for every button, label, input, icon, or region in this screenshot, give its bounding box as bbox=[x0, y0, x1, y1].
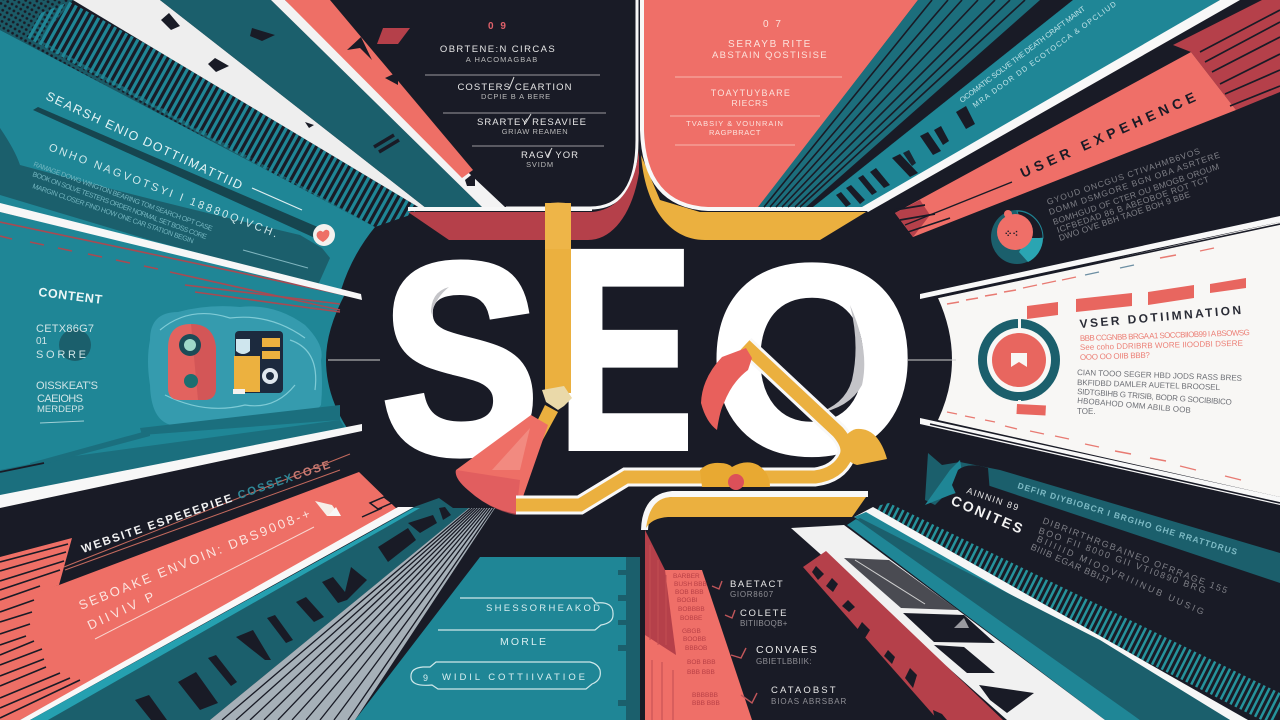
subheading: search: ONHO NAGVOTSYI I 18880QIVCH. bbox=[47, 142, 279, 240]
callout: top label bbox=[438, 598, 613, 630]
text: item 4: BIOAS ABRSBAR bbox=[771, 697, 847, 706]
text: item 4: CATAOBST bbox=[771, 685, 838, 696]
text block: content list: CETX86G7 bbox=[36, 323, 94, 335]
divider: white band top bbox=[0, 203, 362, 300]
text block: content list: MERDEPP bbox=[37, 404, 84, 415]
text: item 4 bbox=[771, 685, 847, 706]
illustration: yellow mechanism bbox=[456, 202, 887, 515]
text: contents overline: AINNIN 89 bbox=[965, 485, 1020, 512]
text block: content list: OISSKEAT'S bbox=[36, 380, 98, 392]
text: item 1: OBRTENE:N CIRCAS bbox=[440, 44, 556, 55]
pipe bbox=[516, 345, 847, 505]
text: sub 1: ABSTAIN QOSTISISE bbox=[712, 50, 828, 61]
text block: user experience body bbox=[1045, 146, 1221, 243]
blocks: coral bbox=[1027, 278, 1246, 319]
text block: grey copy: HBOBAHOD OMM ABILB OOB bbox=[1077, 396, 1191, 415]
text: coral notes: BUSH BBB bbox=[674, 581, 707, 588]
strip: red with notches bbox=[803, 551, 1003, 720]
text: coral notes: BOB BBB bbox=[687, 659, 716, 666]
icon: black device bbox=[233, 331, 283, 394]
callout: bottom label: WIDIL COTTIIVATIOE bbox=[442, 672, 585, 683]
text block: content list: SORRE bbox=[36, 349, 86, 361]
text: heading 1: SERAYB RITE bbox=[728, 39, 812, 50]
panel: bottom right strips bbox=[791, 453, 1280, 720]
text block: grey copy: TOE. bbox=[1077, 407, 1096, 416]
callout: top label: SHESSORHEAKOD bbox=[486, 603, 600, 614]
band: red curve bbox=[408, 150, 639, 240]
text block: contents body: DIBRIRTHRGBAINEO OFRRAGE 155 bbox=[1041, 516, 1229, 595]
callout: bottom label: 9 bbox=[423, 673, 428, 683]
text: item 2 bbox=[740, 608, 788, 628]
text: coral notes: BARBER bbox=[673, 573, 700, 580]
label: number: 0 7 bbox=[763, 19, 783, 30]
icon: red device bbox=[168, 324, 216, 400]
panel: mobile optimisation bbox=[355, 557, 640, 720]
text block: coral copy bbox=[1080, 328, 1250, 362]
connector line right bbox=[908, 359, 956, 361]
text: item 3: CONVAES bbox=[756, 644, 818, 656]
icon: ring with bookmark bbox=[978, 317, 1060, 416]
blocks: dark ticks bbox=[135, 507, 451, 720]
title: SEO: E bbox=[557, 190, 694, 509]
strip: white with dark blocks bbox=[791, 525, 1105, 720]
panel: top right fan bbox=[758, 0, 1240, 212]
text: small teal lines: MRA DOOR DD ECOTOCCA & OPCLIUD bbox=[971, 0, 1118, 110]
text: coral notes: BBB BBB bbox=[687, 669, 715, 676]
label: number: 0 9 bbox=[488, 21, 508, 32]
heading: search: SEARSH ENIO DOTTIIMATTIID bbox=[44, 89, 245, 193]
text: item 3: SRARTEY RESAVIEE bbox=[477, 117, 587, 128]
icon: pie donut bbox=[991, 210, 1043, 264]
text: item 1: BAETACT bbox=[730, 579, 784, 590]
icon: heart badge bbox=[313, 224, 335, 246]
text: coral notes: BOOBB bbox=[683, 636, 706, 643]
text block: contents body: BIIIIID MIOOVRIIINUB UUSIG bbox=[1035, 534, 1206, 617]
illustration: devices on blob bbox=[148, 306, 322, 429]
callout: bottom label bbox=[411, 662, 600, 689]
text block: search body: BOOK ON SOLVE TESTERS ORDER NORMAL SET BOSS CORE bbox=[31, 171, 208, 241]
text: sub 2: RIECRS bbox=[732, 98, 768, 108]
panel: bottom left strips bbox=[20, 498, 495, 720]
title: SEO bbox=[382, 190, 916, 510]
text: item 4 sub: SVIDM bbox=[526, 160, 554, 169]
panel: top right coral list bbox=[641, 0, 918, 240]
text: heading 3: TVABSIY & VOUNRAIN bbox=[686, 119, 784, 128]
text: item 1: GIOR8607 bbox=[730, 590, 774, 599]
text: sub 3: RAGPBRACT bbox=[709, 128, 761, 137]
text block: coral copy: BBB CCGNBB BRGA A1 SOCCBIIOB99 I A BSOWSG bbox=[1080, 328, 1250, 343]
text: coral notes: BOGBI bbox=[677, 597, 698, 604]
text: item 4: RAGV YOR bbox=[521, 150, 579, 161]
text block: content list: CAEIOHS bbox=[37, 393, 83, 405]
text block: grey copy: BKFIDBD DAMLER AUETEL BROOSEL bbox=[1077, 378, 1221, 392]
heading: content: CONTENT bbox=[38, 285, 103, 307]
text block: user experience body: BOMHGUD OF CTER OU BMOGB OROUM bbox=[1051, 161, 1220, 227]
title: SEO: O bbox=[708, 209, 916, 509]
heading: user experience: USER EXPEHENCE bbox=[1018, 89, 1198, 181]
title: SEO: S bbox=[382, 208, 539, 510]
divider: coral lines bbox=[0, 222, 345, 312]
text block: contents body: BOO FII 8000 GII VTI0890 BRG bbox=[1037, 525, 1207, 595]
text block: user experience body: ICFBEDAD 86 B ABEOBOE ROT TCT bbox=[1055, 174, 1210, 235]
blob: pipe end bbox=[840, 429, 887, 465]
shape: coral hook bbox=[701, 348, 752, 430]
panel: user experience bbox=[895, 0, 1280, 264]
text block: coral copy: See coho DDRIBRB WORE IIOODBI DSERE bbox=[1080, 339, 1243, 352]
panel: content bbox=[0, 212, 347, 497]
text: item 2: BITIIBOQB+ bbox=[740, 619, 788, 628]
stripes: grey fan bbox=[210, 508, 495, 720]
heading: search engine: SEBOAKE ENVOIN: DBS9008-+ bbox=[77, 506, 312, 613]
text block: coral copy: OOO OO OIIB BBB? bbox=[1080, 351, 1151, 362]
text: small teal lines: OCOMATIC SOLVE THE DEATH CRAFT MAINT bbox=[958, 4, 1087, 105]
text: item 2: COSTERS CEARTION bbox=[457, 82, 573, 93]
text: item 3 sub: GRIAW REAMEN bbox=[502, 127, 568, 136]
text: item 2: COLETE bbox=[740, 608, 788, 619]
text block: content list bbox=[36, 323, 98, 415]
text: coral notes: BBB BBB bbox=[692, 700, 720, 707]
text: item 2 sub: DCPIE B A BERE bbox=[481, 92, 551, 101]
dashes: coral bbox=[947, 248, 1241, 480]
text: subheading: DIIVIV P bbox=[85, 589, 157, 633]
text block: user experience body: GYOUD ONCGUS CTIVAHMB6VOS bbox=[1045, 146, 1201, 207]
panel: user optimisation bbox=[920, 216, 1280, 505]
text: coral notes: GBGB bbox=[682, 628, 701, 635]
text: heading 2: TOAYTUYBARE bbox=[711, 88, 791, 98]
text block: user experience body: DOMM DSMGORE BGN OBA ASRTERE bbox=[1047, 150, 1221, 217]
icon: arrow bbox=[315, 501, 341, 516]
blob: centre connector bbox=[700, 462, 770, 490]
text block: user experience body: DWO OVE BBH TAOE BOH 9 BBE bbox=[1057, 189, 1192, 243]
heading: user optimisation: VSER DOTIIMNATION bbox=[1079, 303, 1242, 331]
heading: contents: CONITES bbox=[949, 492, 1025, 536]
text: coral notes: BBBOB bbox=[685, 645, 707, 652]
label: website experience: WEBSITE ESPEEEPIEE COSSEXCOSE bbox=[80, 459, 332, 556]
crescent: S shadow bbox=[431, 287, 449, 315]
text: item 1 sub: A HACOMAGBAB bbox=[466, 55, 538, 64]
text block: grey copy: CIAN TOOO SEGER HBD JODS RASS BRES bbox=[1077, 368, 1242, 383]
connector line left bbox=[328, 359, 380, 361]
icon: coral cone bbox=[456, 415, 548, 515]
text: coral notes: BOBBBB bbox=[678, 606, 705, 613]
text block: content list: 01 bbox=[36, 336, 48, 347]
text block: grey copy bbox=[1077, 368, 1242, 416]
divider: white band bottom bbox=[0, 424, 362, 508]
text: coral notes: BOB BBB bbox=[675, 589, 704, 596]
text: coral notes bbox=[673, 573, 720, 707]
panel: website experience bbox=[0, 454, 398, 720]
text: item 3 bbox=[756, 644, 818, 666]
text block: grey copy: SIDTGBIHB G TRISIB, BODR G SOCIBIBICO bbox=[1077, 387, 1232, 407]
text: item 1 bbox=[730, 579, 784, 599]
text: coral notes: BBBBBB bbox=[692, 692, 718, 699]
icon: pie donut: ⁘⁖ bbox=[1004, 229, 1018, 240]
text block: search body: RAMAGE DOWG WINGTON BEARING TOM SEARCH OPT CASE bbox=[32, 161, 214, 233]
text: dark teal band label: DEFIR DIYBIOBCR I BRGIHO GHE RRATTDRUS bbox=[1016, 480, 1239, 557]
text block: contents body: BIIIB EGAR BBIJT bbox=[1029, 542, 1112, 586]
band: yellow bottom curve bbox=[641, 491, 868, 530]
text: coral notes: BOBBE bbox=[680, 615, 703, 622]
panel: search engine optimisation bbox=[0, 0, 420, 290]
crescent: O shadow bbox=[815, 305, 864, 414]
panel: bottom centre list bbox=[645, 530, 847, 720]
text: item 3: GBIETLBBIIK: bbox=[756, 657, 812, 666]
panel: top centre list bbox=[408, 0, 639, 240]
text block: search body: MARGIN CLOSER FIND HOW ONE CAR STATION BEGIN bbox=[31, 183, 194, 245]
panel: top-left stripes bbox=[73, 0, 506, 208]
ticks: dark bars bbox=[836, 106, 975, 207]
label: mobile: MORLE bbox=[500, 636, 546, 648]
